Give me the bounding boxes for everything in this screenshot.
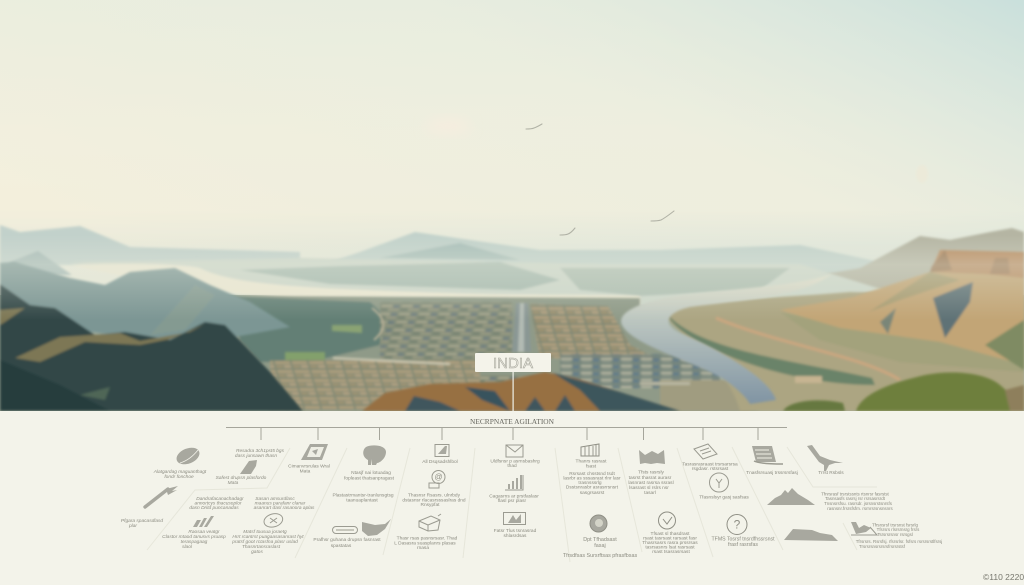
text block: right notes: Tnsnsrsfsu. rasrsdr. jsrsnsrstsnrsfs <box>824 501 893 506</box>
item: leaf: fondr fonchoe <box>164 474 194 480</box>
foreground trees <box>783 372 1024 411</box>
central foreground hill <box>362 372 680 411</box>
item: scroll <box>746 446 798 476</box>
item: tablet: dass junsawn thasn <box>235 453 277 459</box>
text block: right notes: rasnsnr.frsrsfsfrn. rsrnrsrsnsnsnrs <box>827 506 893 511</box>
item: box: Thasr rsas pasnsrsasr. Thad <box>397 536 458 542</box>
item: building: lasrbr as sssasrast rlnr lasr <box>563 476 621 482</box>
item: shoe icon with notes: Tfsrsrs rlsrsrnsrg frsrs <box>877 527 920 532</box>
lower panel <box>0 411 1024 585</box>
item: ring: Hrrt rcantrst puagaasasanrast hyt <box>232 534 304 540</box>
item: tree <box>332 445 395 504</box>
item: document: All Dsqsadshlbol <box>422 459 458 465</box>
item: scroll: Tnasfsrsuasj trssrsrsfasj <box>746 470 798 476</box>
item: shoe icon with notes: Tfrsnsrsf trsrsnst fsrsrlg <box>872 522 918 528</box>
item: ring: Sasan amsurdlasc <box>255 496 295 502</box>
item: ring: gatos <box>251 549 263 555</box>
text block: right notes <box>821 492 893 511</box>
item: check circle: Thasrsasrs rasra prssrsas <box>642 540 698 546</box>
item: wading bird: Trrst Rsbsls <box>818 470 844 476</box>
item: leaf <box>153 445 207 480</box>
item: bars: dasn Dritd puncanadas <box>189 505 239 511</box>
item: capsule and bird: Prafhsr guhana drupsn fasnrast <box>313 537 381 543</box>
item: ring <box>231 496 315 555</box>
item: tablet <box>216 448 285 486</box>
item: envelope <box>490 445 540 469</box>
item: building: sasgrsasrst <box>580 490 605 496</box>
item: check circle: tasrsasnrs lsat rasrsast <box>645 544 695 550</box>
item: laptop <box>288 444 330 474</box>
item: ring: pratsf goot rctasfna plasr uslad <box>231 539 298 545</box>
item: wading bird <box>807 445 844 476</box>
item: bar chart icon <box>489 475 539 504</box>
item: tree: fopleast thatsanpragast <box>344 476 395 482</box>
India label with connector: INDIA <box>493 355 533 372</box>
icon: jagged mountain <box>767 488 815 505</box>
item: wavy map: tasrst thasrat aurasr <box>629 475 672 481</box>
item: picture frame: Fatsr Tlus tsnrasrad <box>494 528 537 534</box>
item: envelope: Uldfsnsr p asrnsbashrg <box>490 458 540 464</box>
panel heading: NECRPNATE AGILATION <box>470 417 555 426</box>
distant hills <box>0 225 1024 300</box>
item: ring: Matsf tousua joraetg <box>243 529 287 535</box>
item: check circle: rsast tsasrasrsast <box>652 549 690 555</box>
item: target circle <box>563 515 637 559</box>
item: capsule and bird: spastatas <box>331 543 352 549</box>
icon: low mesa <box>784 529 838 541</box>
item: building <box>563 444 621 496</box>
item: check circle: Tfsast sl thasdrast <box>651 531 690 537</box>
item: ring: asanrart dasl rasanora aplas <box>254 505 315 511</box>
green valley <box>228 296 395 362</box>
item: check circle: rsast tasrsast rarsast fasr <box>643 536 697 542</box>
item: building: Rsrsast chsstsnd tsdt <box>569 471 615 477</box>
item: building: Thanrs rasrast <box>576 458 607 464</box>
item: target circle: Tfrsdfsas Sursrftsas pfrasfbsas <box>563 553 637 559</box>
item: box: rnasa <box>417 545 429 551</box>
item: bars: Dandrafacanachadagr <box>196 496 244 502</box>
item: document <box>422 444 458 465</box>
city valley floor <box>228 296 760 411</box>
connector tree <box>226 428 787 440</box>
item: at sign <box>402 470 466 508</box>
item: building: fsast <box>586 464 597 470</box>
item: fork <box>121 486 178 529</box>
birds in flight <box>526 124 674 235</box>
item: tablet: Mata <box>228 480 239 486</box>
item: picture frame: shlasrdsas <box>504 533 527 539</box>
item: target circle: fasaj <box>594 543 606 549</box>
winding river <box>621 274 832 404</box>
haze overlay <box>0 235 1024 320</box>
item: shoe icon with notes: Tsrsrsrsnsr rsrsgsl <box>877 532 913 537</box>
item: wavy map: lasnrast rasrsa ssrasl <box>628 480 674 486</box>
item: at sign: @ <box>434 472 443 482</box>
left mountains, front layer <box>0 284 303 411</box>
item: bar chart icon: flasl psr plasr <box>498 498 527 504</box>
item: at sign: Rnsypfat <box>421 502 440 508</box>
item: bars: teraspagaag <box>181 539 208 545</box>
item: building: trasnsssrlg <box>578 480 602 486</box>
item: bars <box>162 496 244 550</box>
item: at sign: Thasnsr Rsasrs. ulnrbdy <box>408 492 461 498</box>
sky background <box>0 0 1024 411</box>
item: tree: taanuaplantast <box>346 498 378 504</box>
item: tablet: Resadra 3ch1pst5 bgs <box>236 448 285 454</box>
item: tablet: Safest drupsn plasfordo <box>216 475 267 481</box>
item: laptop: Mata <box>300 468 311 474</box>
item: question circle <box>711 514 775 548</box>
item: building: Dsstsnrasbr asrasrrsnsrt <box>566 484 619 490</box>
item: question circle: ? <box>734 518 741 532</box>
item: ring: maanus parafanr clanar <box>255 500 306 506</box>
item: picture frame <box>494 512 537 539</box>
item: fork: plar <box>128 523 137 529</box>
text block: right notes: Tasnsasfs rasrsj rsr rsrsasrsrdt <box>825 496 886 501</box>
item: shoe icon with notes: Trsrsrsnsrsrsrsfrsrsrstsf <box>859 544 906 549</box>
item: question circle: frasf rasrsfas <box>728 542 758 548</box>
item: bar chart icon: Cagasrns ar prstfaslasr <box>489 494 539 500</box>
item: tree: Ntasjf nai lotuadag <box>351 470 391 476</box>
text block: right notes: Tfnrsrasf trsrstssnts rtsnrsr fasrstst <box>821 492 890 496</box>
item: shoe icon with notes <box>851 522 942 549</box>
item: rupee circle: Tfasnslsyr gasj sasfsas <box>699 494 749 500</box>
item: question circle: TFMS Tosrsf tnsrdfhssrsnst <box>711 536 775 542</box>
left mountains, back layer <box>0 262 303 411</box>
item: bars: Clastor mtaod tanusvs pruasp <box>162 534 226 540</box>
item: target circle: Dpt Tfhadsast <box>583 537 617 543</box>
distant river and plains <box>70 258 900 308</box>
item: at sign: dstasnsr rlacasrsssaslras dnd <box>402 498 466 504</box>
item: bars: annortcys thacusoplor <box>195 500 242 506</box>
item: wavy map: lsasrast sl rslrs nsr <box>629 485 669 491</box>
copyright: ©110 2220 <box>983 572 1024 582</box>
item: bars: Raosaa veatgr <box>188 529 220 535</box>
item: leaf: Alatgardag maguanthagt <box>153 469 207 475</box>
item: fork: Pfgara spacasdlasd <box>121 518 163 524</box>
item: rupee circle <box>699 473 749 500</box>
item: wavy map <box>628 450 674 496</box>
item: tree: Plastastrmantsr-tranlunsgtsg <box>332 492 394 498</box>
item: receipt <box>682 444 738 472</box>
item: wavy map: Tfsts rasrsly <box>638 470 665 476</box>
India label with connector <box>475 353 551 411</box>
item: shoe icon with notes: Tfrsrsrs. Rsrsfsj. rfsrsrlsr. fsfsrs rsrsrsrstlfsrsj <box>856 539 942 544</box>
mesa mountain range <box>780 250 1024 370</box>
item: laptop: Cimanvrsrulas Wral <box>288 464 330 470</box>
item: receipt: rsgdasr. rstsrsast <box>692 466 729 472</box>
item: bars: slaol <box>182 544 193 550</box>
item: receipt: Tasrasrasraast trsrsarsrsa <box>682 462 738 468</box>
item: ring: Thasnrtansraslast <box>242 544 281 550</box>
item: box <box>394 514 458 551</box>
factory and farmland grid <box>270 302 750 411</box>
right bank plain <box>660 292 1024 411</box>
item: check circle <box>642 512 698 555</box>
item: envelope: thad <box>507 463 517 469</box>
item: wavy map: tasarl <box>644 490 656 496</box>
item: box: L Dasasra suasplanrs plasas <box>394 540 456 546</box>
item: capsule and bird <box>313 519 391 549</box>
